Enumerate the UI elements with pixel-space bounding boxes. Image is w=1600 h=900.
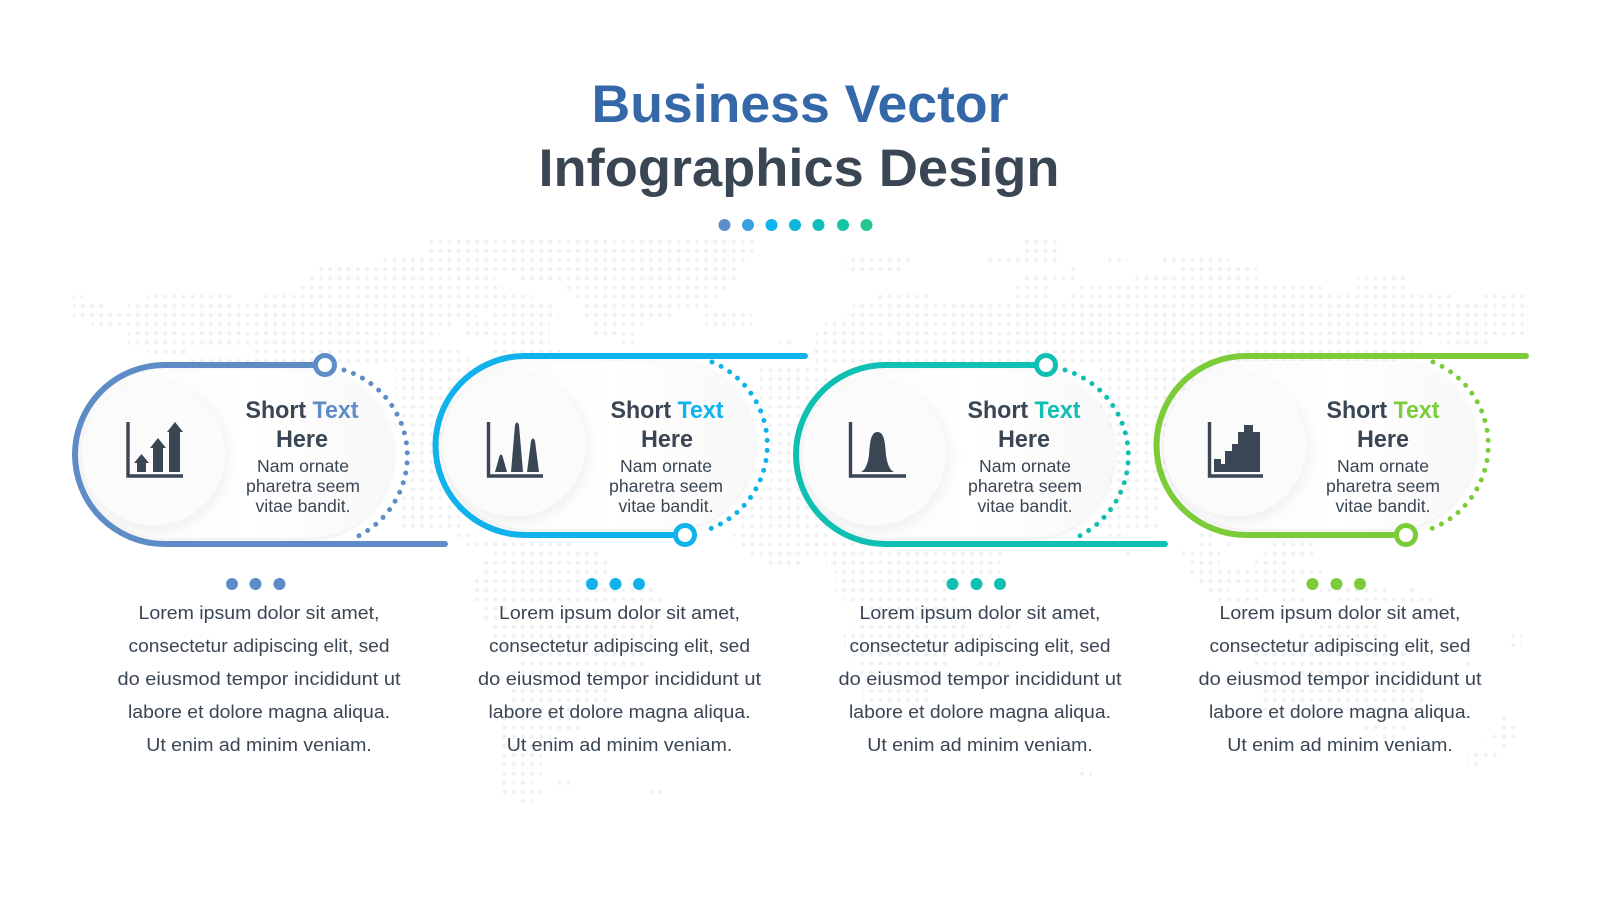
body text: step 4: Lorem ipsum dolor sit amet, [1220,602,1460,623]
icon: rising arrows chart [128,422,183,476]
text block [968,456,1082,516]
text block: vitae bandit. [978,496,1072,516]
body text: step 3: consectetur adipiscing elit, sed [850,635,1110,656]
body text: step 2: do eiusmod tempor incididunt ut [478,668,761,689]
heading: Short Text [610,397,724,424]
panel: step 4: Here [1357,426,1409,453]
dots: step 1 [226,578,286,590]
body text: step 1: consectetur adipiscing elit, sed [128,635,390,656]
body text: step 3: Ut enim ad minim veniam. [867,734,1093,755]
text block: pharetra seem [968,476,1082,496]
body text: step 2: consectetur adipiscing elit, sed [489,635,750,656]
icon: stepped area chart [1210,422,1263,476]
dotted world map background [73,242,1528,801]
dots: step 4 [1306,578,1366,590]
body text: step 4 [1198,602,1482,755]
heading: Short Text [1326,397,1440,424]
body text: step 4: consectetur adipiscing elit, sed [1210,635,1470,656]
text block: Nam ornate [1337,456,1429,476]
text block: pharetra seem [1326,476,1440,496]
title dots [718,219,872,231]
body text: step 2: labore et dolore magna aliqua. [488,701,750,722]
body text: step 2: Ut enim ad minim veniam. [507,734,732,755]
body text: step 4: Ut enim ad minim veniam. [1227,734,1453,755]
panel: step 3: Here [998,426,1050,453]
text block [246,456,360,516]
body text: step 4: labore et dolore magna aliqua. [1209,701,1471,722]
body text: step 1: Lorem ipsum dolor sit amet, [138,602,380,623]
panel: step 2 [435,356,805,544]
dots: step 2 [586,578,645,590]
body text: step 3: Lorem ipsum dolor sit amet, [860,602,1100,623]
body text: step 1: do eiusmod tempor incididunt ut [118,668,400,689]
panel: step 3 [796,356,1165,544]
title [538,75,1060,198]
text block: vitae bandit. [1336,496,1430,516]
text block: vitae bandit. [256,496,350,516]
body text: step 1 [118,602,400,755]
panel: step 4 [1156,356,1526,544]
body text: step 3: do eiusmod tempor incididunt ut [838,668,1122,689]
panel: step 1: Here [276,426,328,453]
panel: step 1 [75,356,445,544]
icon: peaks chart [488,422,543,476]
text block: Nam ornate [620,456,712,476]
panel: step 2: Here [641,426,693,453]
title: Infographics Design [538,139,1060,198]
body text: step 4: do eiusmod tempor incididunt ut [1198,668,1482,689]
body text: step 3 [838,602,1122,755]
heading: Short Text [246,397,358,424]
text block: pharetra seem [609,476,723,496]
dots: step 3 [946,578,1006,590]
heading: Short Text [968,397,1080,424]
text block [609,456,723,516]
body text: step 1: Ut enim ad minim veniam. [146,734,372,755]
icon: bell curve chart [850,422,906,476]
body text: step 3: labore et dolore magna aliqua. [849,701,1111,722]
body text: step 1: labore et dolore magna aliqua. [128,701,390,722]
text block: vitae bandit. [618,496,714,516]
body text: step 2 [478,602,761,755]
text block: Nam ornate [257,456,349,476]
body text: step 2: Lorem ipsum dolor sit amet, [499,602,740,623]
text block [1326,456,1440,516]
title: Business Vector [592,75,1008,134]
text block: pharetra seem [246,476,360,496]
text block: Nam ornate [979,456,1071,476]
